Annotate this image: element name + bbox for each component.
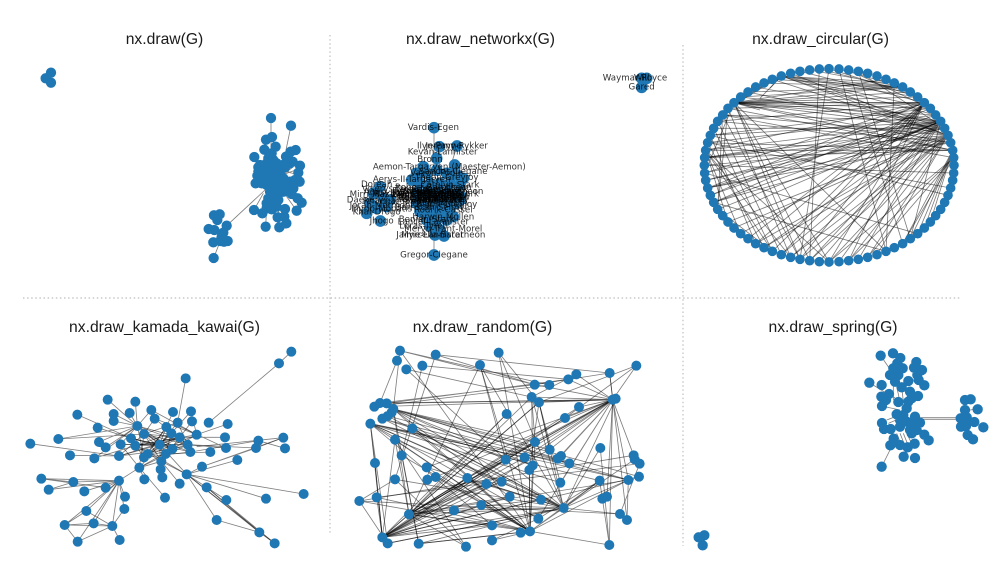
- node labels: Rhaegar-Targaryen: [363, 196, 444, 206]
- node labels: Rodrik-Cassel: [414, 206, 473, 216]
- node labels: Barristan-Selmy: [395, 203, 465, 213]
- node labels: Gregor-Clegane: [400, 250, 468, 260]
- node labels: Cersei-Lannister: [398, 193, 469, 203]
- node labels: Maester-Luwin: [392, 189, 455, 199]
- node labels: Robert-Baratheon: [395, 183, 472, 193]
- node labels: Bronn: [417, 155, 443, 165]
- node labels: Stannis-Baratheon: [403, 187, 483, 197]
- node labels: Bran-Stark: [417, 192, 463, 202]
- node labels: Tyrion-Lannister: [398, 190, 468, 200]
- node labels: Theon-Greyjoy: [414, 173, 479, 183]
- panel: nx.draw graph: [46, 73, 302, 258]
- node labels: Robb-Stark: [416, 189, 464, 199]
- edges: [30, 352, 304, 543]
- node labels: Jhogo: [369, 217, 394, 227]
- node labels: Jon-Snow: [416, 188, 457, 198]
- node labels: Sansa-Stark: [411, 196, 463, 206]
- node labels: Myrcella-Baratheon: [401, 231, 485, 241]
- edges: [705, 69, 954, 262]
- node labels: Jeremy-Rykker: [424, 142, 488, 152]
- nodes: [704, 69, 954, 262]
- node labels: Lysa-Arryn: [424, 192, 469, 202]
- node labels: Roose-Bolton: [398, 194, 455, 204]
- title: nx.draw: nx.draw(G): [126, 31, 203, 48]
- node labels: Loras-Tyrell: [399, 221, 447, 231]
- nodes: [699, 353, 983, 545]
- panel: nx.draw_kamada_kawai graph: [30, 352, 304, 543]
- nodes: [359, 351, 640, 547]
- node labels: Aemon-Targaryen-(Maester-Aemon): [373, 162, 526, 172]
- node labels: Aggo: [364, 187, 386, 197]
- node labels: Mirri-Maz-Duur: [350, 190, 414, 200]
- title: nx.draw_networkx: nx.draw_networkx(G): [406, 31, 555, 48]
- edges: [869, 356, 975, 467]
- node labels: Will: [634, 74, 649, 84]
- edges: [214, 118, 302, 258]
- node labels: Joffrey-Baratheon: [391, 187, 468, 197]
- edges: [359, 351, 640, 547]
- node labels: Gared: [629, 82, 655, 92]
- node labels: Arya-Stark: [417, 194, 463, 204]
- node labels: Eddard-Stark: [412, 185, 468, 195]
- node labels: Viserys-Targaryen: [362, 185, 438, 195]
- node labels: [347, 74, 667, 260]
- node labels: Jaime-Lannister: [395, 231, 464, 241]
- node labels: Vardis-Egen: [408, 123, 459, 133]
- panel: nx.draw_circular graph: [704, 69, 954, 262]
- node labels: Vayon-Poole: [410, 168, 463, 178]
- edges: [400, 128, 457, 255]
- node labels: Walder-Frey: [418, 195, 469, 205]
- panel: nx.draw_spring graph: [699, 353, 983, 545]
- title: nx.draw_random: nx.draw_random(G): [413, 319, 552, 336]
- node labels: Kevan-Lannister: [408, 147, 478, 157]
- nodes: [46, 73, 302, 258]
- node labels: Daenerys-Targaryen: [347, 196, 433, 206]
- node labels: Illyrio-Mopatis: [351, 204, 413, 214]
- nodes: [30, 352, 304, 543]
- title: nx.draw_circular: nx.draw_circular(G): [752, 31, 889, 48]
- node labels: Catelyn-Stark: [421, 180, 479, 190]
- node labels: Jorah-Mormont: [349, 201, 414, 211]
- node labels: Harwin-Mollen: [412, 212, 474, 222]
- title: nx.draw_kamada_kawai: nx.draw_kamada_kawai(G): [69, 319, 260, 336]
- panel: nx.draw_random graph: [359, 351, 640, 547]
- node labels: Ilyn-Payne: [417, 142, 462, 152]
- node labels: Tywin-Lannister: [392, 186, 461, 196]
- node labels: Khal-Drogo: [353, 207, 401, 217]
- node labels: Balon-Greyjoy: [416, 200, 477, 210]
- node labels: Rakharo-Qotho: [374, 190, 439, 200]
- node labels: Benjen-Stark: [399, 215, 455, 225]
- node labels: Renly-Baratheon: [391, 191, 463, 201]
- node labels: Rickard-Stark: [421, 190, 479, 200]
- title: nx.draw_spring: nx.draw_spring(G): [768, 319, 898, 336]
- node labels: Lancel-Lannister: [398, 218, 470, 228]
- node labels: Grand-Maester: [401, 195, 466, 205]
- node labels: Meryn-Trant-Morel: [404, 225, 482, 235]
- node labels: Doreah: [361, 180, 392, 190]
- panel: nx.draw_networkx graph: [347, 74, 667, 260]
- nodes: [367, 78, 647, 255]
- node labels: Waymar-Royce: [603, 74, 667, 84]
- node labels: Sandor-Clegane: [419, 167, 488, 177]
- node labels: Aerys-II-Targaryen: [373, 175, 451, 185]
- node labels: Petyr-Baelish: [412, 198, 468, 208]
